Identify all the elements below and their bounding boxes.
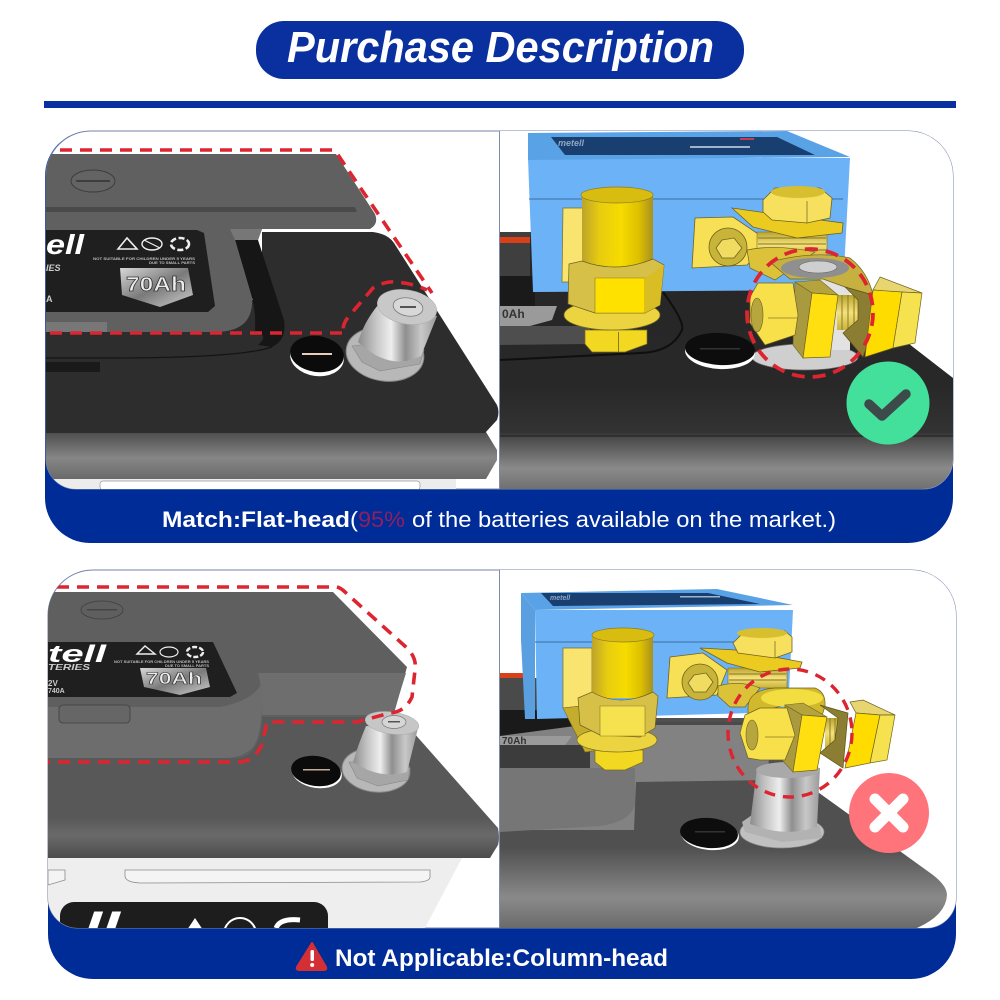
label: 70Ah sticker: tell	[48, 641, 108, 668]
coin	[291, 756, 342, 788]
label: 70Ah sticker: 740A	[48, 688, 65, 695]
label: 70Ah sticker: TERIES	[48, 663, 91, 672]
label: 70Ah sticker: A	[46, 294, 53, 304]
red X badge	[849, 773, 929, 853]
blue box: metell	[558, 138, 585, 148]
red dashed outline	[48, 587, 415, 762]
brass clamp	[692, 186, 922, 370]
coin	[290, 336, 344, 376]
image: flat-head battery terminal	[46, 150, 498, 490]
caption: match: (	[350, 507, 359, 532]
caption: match: Match:Flat-head	[162, 507, 350, 532]
panel: not applicable column-head	[48, 570, 956, 979]
caption: not applicable: Not Applicable:Column-head	[335, 945, 668, 972]
brass post left	[563, 628, 658, 770]
coin	[680, 818, 739, 850]
label: 70Ah sticker	[48, 641, 237, 697]
blue box: metell	[550, 595, 571, 602]
title: Purchase Description	[287, 23, 714, 72]
silver column	[740, 762, 824, 848]
label: 70Ah sticker	[46, 229, 215, 312]
label: 70Ah sticker: 70Ah	[146, 669, 202, 688]
red dashed outline: lid	[60, 150, 432, 293]
caption: match: of the batteries available on the market.)	[412, 507, 836, 532]
silver flat-head post	[340, 708, 420, 795]
label: 70Ah sticker: IES	[46, 263, 61, 273]
label: 70Ah sticker: ell	[46, 229, 85, 260]
coin	[685, 333, 755, 370]
blue box	[521, 589, 793, 719]
image: column-head battery: ll	[84, 905, 122, 946]
label: 70Ah sticker: 70Ah	[126, 274, 186, 296]
brass post left	[562, 187, 664, 352]
brass clamp	[667, 628, 895, 848]
silver base	[752, 275, 858, 370]
red dashed circle	[728, 669, 852, 797]
image: clamp on flat-head terminal: 0Ah	[502, 307, 525, 321]
image: clamp on flat-head terminal	[500, 131, 953, 489]
green check badge	[846, 362, 930, 444]
label: 70Ah sticker: 2V	[48, 679, 58, 688]
image: clamp on column-head: 70Ah	[502, 736, 526, 747]
image: column-head battery	[48, 587, 499, 950]
silver flat-head post	[346, 289, 437, 382]
caption: match: 95%	[358, 507, 405, 532]
label: 70Ah sticker: NOT SUITABLE FOR CHILDREN UNDER 5 YEARS	[93, 256, 195, 261]
label: 70Ah sticker: DUE TO SMALL PARTS	[149, 260, 195, 265]
red dashed outline: lower	[50, 282, 427, 333]
red dashed circle	[747, 249, 873, 377]
label: 70Ah sticker: DUE TO SMALL PARTS	[165, 664, 210, 668]
label: 70Ah sticker: NOT SUITABLE FOR CHILDREN UNDER 5 YEARS	[114, 660, 210, 664]
panel: match flat-head	[45, 131, 953, 543]
blue box	[528, 131, 850, 292]
caption: match	[162, 507, 836, 532]
image: clamp on column-head	[500, 570, 956, 928]
icon: warning triangle	[297, 943, 326, 970]
